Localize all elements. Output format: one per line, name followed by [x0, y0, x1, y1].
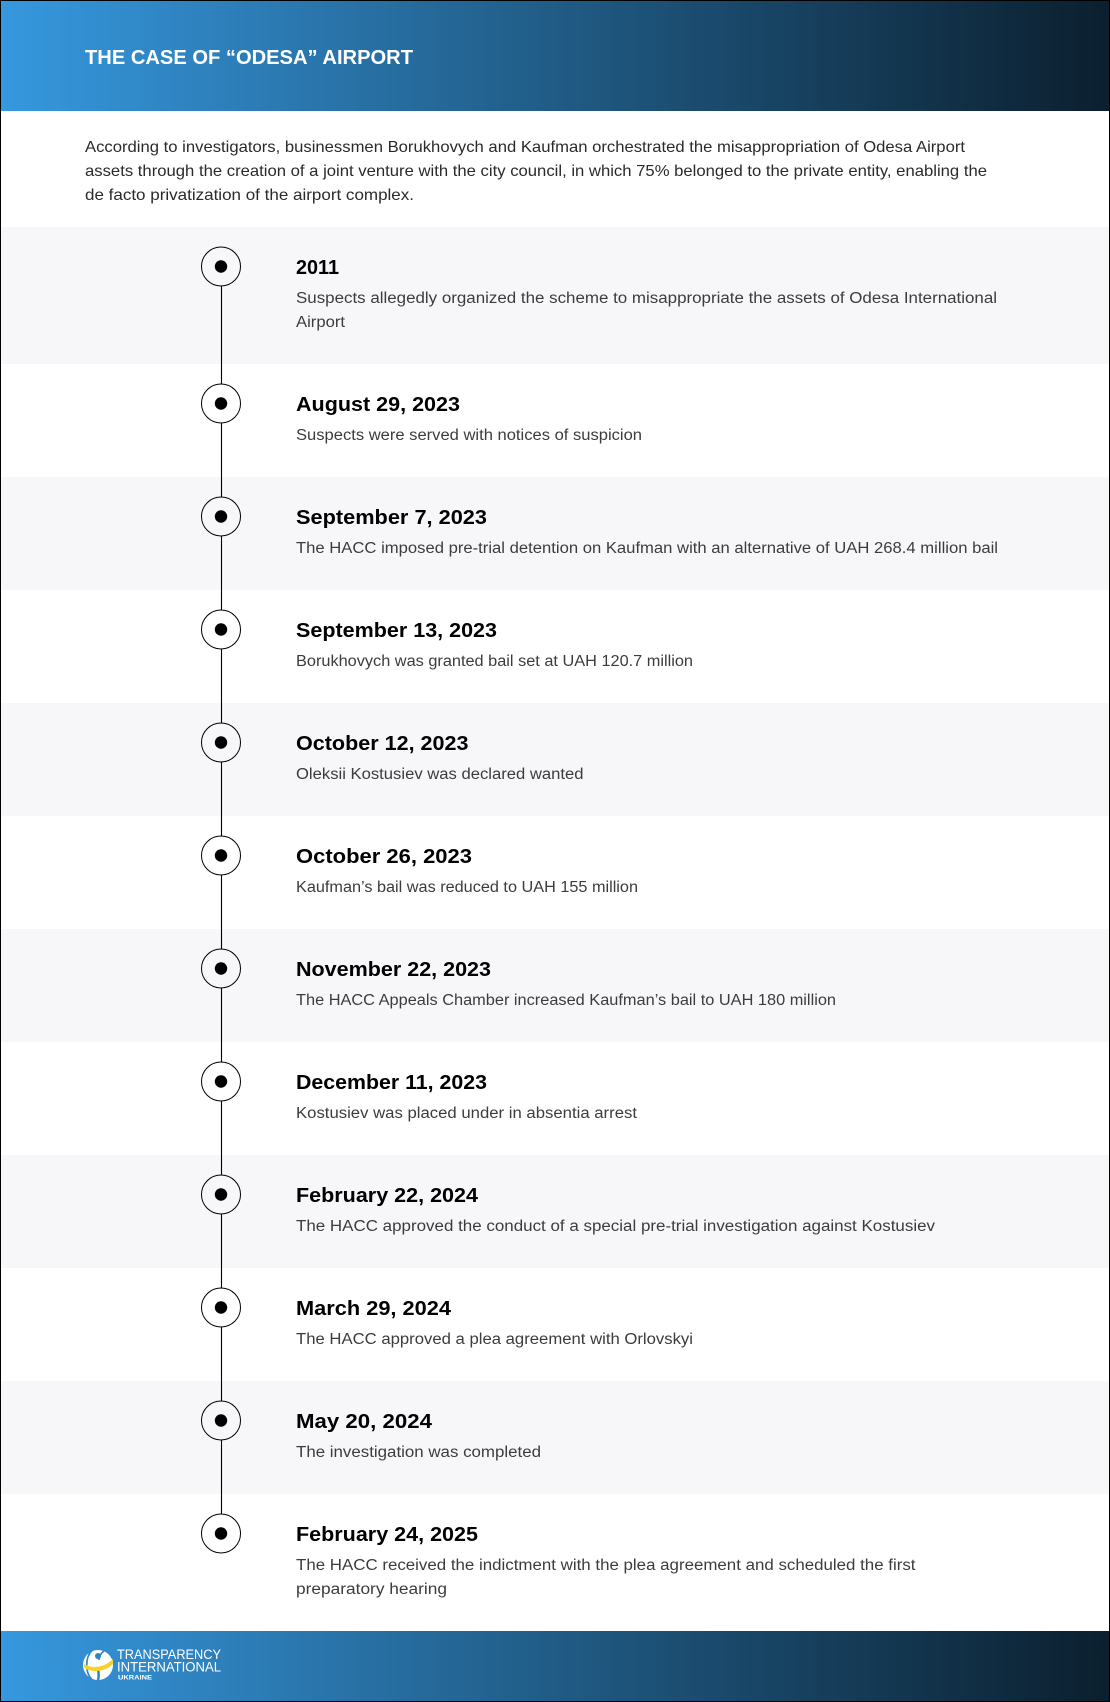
intro paragraph: de facto privatization of the airport complex.	[85, 187, 414, 204]
timeline entry: September 7, 2023: The HACC imposed pre-trial detention on Kaufman with an alternative of UAH 268.4 million bail	[296, 540, 998, 557]
timeline entry: August 29, 2023: August 29, 2023	[296, 394, 460, 416]
timeline entry: October 12, 2023: October 12, 2023	[296, 733, 468, 755]
timeline entry: October 26, 2023: October 26, 2023	[296, 846, 472, 868]
title: THE CASE OF “ODESA” AIRPORT	[85, 46, 413, 69]
timeline entry: November 22, 2023: November 22, 2023	[296, 959, 491, 981]
timeline entry: December 11, 2023: December 11, 2023	[296, 1072, 487, 1094]
timeline entry: March 29, 2024: The HACC approved a plea agreement with Orlovskyi	[296, 1331, 693, 1348]
timeline entry: February 24, 2025	[202, 1514, 916, 1598]
intro paragraph: According to investigators, businessmen Borukhovych and Kaufman orchestrated the misappropriation of Odesa Airport	[85, 139, 966, 156]
timeline entry: 2011	[202, 247, 997, 331]
timeline entry: November 22, 2023	[202, 949, 836, 1009]
timeline entry: November 22, 2023: The HACC Appeals Chamber increased Kaufman’s bail to UAH 180 million	[296, 992, 836, 1009]
logo wordmark: UKRAINE	[118, 1674, 153, 1682]
timeline entry: February 24, 2025: The HACC received the indictment with the plea agreement and scheduled the first	[296, 1557, 916, 1574]
timeline entry: December 11, 2023: Kostusiev was placed under in absentia arrest	[296, 1105, 638, 1122]
timeline entry: September 7, 2023: September 7, 2023	[296, 507, 487, 529]
footer band	[0, 1631, 1110, 1702]
timeline entry: 2011: Suspects allegedly organized the scheme to misappropriate the assets of Odesa International	[296, 290, 997, 307]
logo wordmark: TRANSPARENCY	[117, 1647, 221, 1662]
timeline entry: February 22, 2024	[202, 1175, 935, 1235]
timeline entry: December 11, 2023	[202, 1062, 638, 1122]
timeline entry: March 29, 2024: March 29, 2024	[296, 1298, 452, 1320]
timeline entry: 2011: Airport	[296, 314, 346, 331]
timeline entry: May 20, 2024: The investigation was completed	[296, 1444, 541, 1461]
timeline entry: August 29, 2023	[202, 384, 642, 444]
timeline entry: October 26, 2023	[202, 836, 638, 896]
intro paragraph	[85, 139, 987, 204]
timeline entry: October 12, 2023: Oleksii Kostusiev was declared wanted	[296, 766, 584, 783]
icon: Transparency International globe logo	[83, 1650, 113, 1680]
timeline entry: February 22, 2024: The HACC approved the conduct of a special pre-trial investigation against Kostusiev	[296, 1218, 935, 1235]
timeline entry: August 29, 2023: Suspects were served with notices of suspicion	[296, 427, 642, 444]
timeline entry: February 22, 2024: February 22, 2024	[296, 1185, 479, 1207]
intro paragraph: assets through the creation of a joint venture with the city council, in which 75% belonged to the private entity, enabling the	[85, 163, 987, 180]
timeline line	[220, 286, 222, 1514]
timeline entry: March 29, 2024	[202, 1288, 693, 1348]
timeline entry: September 13, 2023: Borukhovych was granted bail set at UAH 120.7 million	[296, 653, 693, 670]
logo wordmark	[117, 1647, 221, 1682]
timeline entry: February 24, 2025: February 24, 2025	[296, 1524, 478, 1546]
timeline entry: October 26, 2023: Kaufman’s bail was reduced to UAH 155 million	[296, 879, 638, 896]
timeline entry: September 13, 2023: September 13, 2023	[296, 620, 497, 642]
timeline entry: February 24, 2025: preparatory hearing	[296, 1581, 447, 1598]
timeline entry: September 7, 2023	[202, 497, 998, 557]
timeline entry: May 20, 2024: May 20, 2024	[296, 1411, 433, 1433]
timeline entry: 2011: 2011	[296, 257, 339, 279]
header band	[0, 0, 1110, 111]
logo wordmark: INTERNATIONAL	[117, 1660, 221, 1674]
timeline entry: September 13, 2023	[202, 610, 693, 670]
timeline entry: May 20, 2024	[202, 1401, 541, 1461]
timeline entry: October 12, 2023	[202, 723, 584, 783]
